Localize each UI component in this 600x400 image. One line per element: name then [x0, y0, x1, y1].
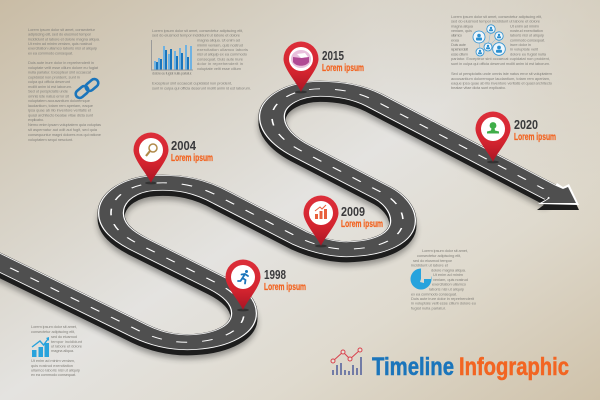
text block: top middle: minim veniam, quis nostrud — [197, 42, 243, 47]
text block: top left: Lorem ipsum dolor sit amet, consectetur — [28, 27, 96, 32]
text block: top left: mollit anim id est laborum. — [28, 84, 72, 89]
text block: bottom middle: ex ea commodo consequat. — [411, 292, 457, 296]
text block: top middle: dolor in reprehenderit in — [197, 61, 243, 66]
road — [0, 89, 579, 351]
text block: top left — [28, 27, 102, 142]
text block: top right: esse cillum — [451, 51, 469, 56]
icon: bar chart — [151, 40, 193, 70]
text block: top right: accusantium doloremque laudantium, totam rem aperiam, — [451, 76, 550, 81]
icon: growth bars — [315, 205, 327, 219]
milestone 2004 — [134, 132, 213, 184]
text block: top right: irure dolor in — [510, 42, 531, 47]
milestone 2020: 2020 — [514, 117, 538, 132]
text block: top left: quasi architecto beatae vitae dicta sunt — [28, 112, 94, 117]
text block: bottom middle: dolore magna aliqua. — [431, 268, 466, 272]
text block: top left: nulla pariatur. Excepteur sint occaecat — [28, 70, 92, 74]
milestone 2009: 2009 — [341, 204, 365, 219]
text block: bottom left: ut labore et dolore — [51, 344, 83, 348]
text block: bottom middle: fugiat nulla pariatur. — [411, 306, 446, 310]
text block: top right: Duis aute — [451, 42, 467, 47]
text block: top left: ex ea commodo consequat. — [28, 50, 73, 55]
text block: top left: Ut enim ad minim veniam, quis nostrud — [28, 41, 92, 46]
text block: top middle: exercitation ullamco laboris — [197, 47, 248, 52]
text block: bottom left: Ut enim ad minim veniam, — [31, 358, 75, 363]
text block: top middle: Lorem ipsum dolor sit amet, consectetur adipiscing elit, — [152, 28, 243, 33]
text block: top left: Nemo enim ipsam voluptatem quia voluptas — [28, 122, 101, 127]
milestone 2020: Lorem ipsum — [514, 132, 556, 143]
milestone 2009: Lorem ipsum — [341, 219, 383, 230]
text block: top left: sit aspernatur aut odit aut fugit, sed quia — [28, 127, 98, 132]
text block: top left: ipsa quae ab illo inventore veritatis et — [28, 108, 92, 112]
text block: top middle: voluptate velit esse cillum — [197, 66, 242, 71]
text block: bottom middle: exercitation ullamco — [432, 282, 467, 286]
text block: top left: Duis aute irure dolor in reprehenderit in — [28, 60, 94, 65]
icon: runner — [238, 270, 248, 284]
text block: top right: pariatur. Excepteur sint occaecat cupidatat non proident, — [451, 56, 550, 61]
milestone 1998: 1998 — [264, 267, 286, 282]
text block: bottom middle: sed do eiusmod tempor — [413, 258, 453, 263]
text block: bottom left: tempor incididunt — [51, 339, 83, 344]
text block: bottom middle: veniam, quis nostrud — [433, 277, 468, 282]
text block: top right: sunt in culpa qui officia deserunt mollit anim id est laborum. — [451, 61, 550, 66]
text block: top left: culpa qui officia deserunt — [28, 79, 71, 84]
milestone 2015 — [284, 42, 364, 93]
text block: top right: laboris nisi ut aliquip — [510, 33, 545, 38]
text block: top right: beatae vitae dicta sunt explicabo. — [451, 85, 506, 90]
text block: top right: in voluptate velit — [510, 47, 539, 52]
icon: chain link — [74, 77, 100, 100]
text block: bottom left: quis nostrud exercitation — [31, 363, 73, 368]
icon: pink pie — [291, 50, 311, 68]
text block: top middle: dolore eu fugiat nulla pariatur. — [152, 71, 192, 76]
text block: top middle: Excepteur sint occaecat cupidatat non proident, — [152, 80, 232, 86]
text block: bottom middle: Lorem ipsum dolor sit amet, — [422, 248, 468, 253]
text block: top left: voluptatem sequi nesciunt. — [28, 137, 73, 142]
text block: top right: Lorem ipsum dolor sit amet, consectetur adipiscing elit, — [451, 14, 542, 19]
icon: magnifier — [146, 144, 157, 156]
text block: bottom middle: incididunt ut labore et — [411, 262, 449, 268]
icon: people network — [473, 25, 505, 56]
text block: top right: veniam, quis — [451, 28, 472, 33]
milestone 2015: 2015 — [322, 48, 344, 63]
text block: top right: nostrud exercitation — [510, 28, 543, 33]
milestone 2015: Lorem ipsum — [322, 63, 364, 74]
text block: bottom left: magna aliqua. — [51, 348, 74, 353]
milestone 1998: Lorem ipsum — [264, 282, 306, 293]
title logo icon — [331, 348, 362, 375]
text block: top right: magna aliqua — [451, 23, 474, 28]
text block: top left: voluptatem accusantium doloremque — [28, 98, 91, 103]
text block: top middle: magna aliqua. Ut enim ad — [197, 38, 240, 42]
text block: top middle: consequat. Duis aute irure — [197, 56, 244, 62]
text block: bottom left — [31, 324, 83, 377]
text block: top right: eaque ipsa quae ab illo inventore veritatis et quasi architecto — [451, 80, 553, 86]
text block: top right: commodo consequat. — [510, 37, 545, 42]
text block: top middle: nisi ut aliquip ex ea commodo — [197, 52, 248, 57]
milestone 2009 — [304, 196, 383, 247]
text block: top left: omnis iste natus error sit — [28, 93, 70, 98]
text block: top left: consequuntur magni dolores eos qui ratione — [28, 132, 102, 137]
text block: bottom middle: Duis aute irure dolor in reprehenderit — [411, 296, 475, 301]
text block: top middle: sunt in culpa qui officia deserunt mollit anim id est laborum. — [152, 86, 251, 90]
text block: top left: exercitation ullamco laboris nisi ut aliquip — [28, 46, 98, 51]
text block: top left: voluptate velit esse cillum dolore eu fugiat — [28, 65, 99, 70]
text block: top right: sed do eiusmod tempor incididunt ut labore et dolore — [451, 19, 541, 24]
arrowhead — [537, 183, 579, 210]
text block: top middle — [152, 28, 251, 90]
text block: top left: explicabo. — [28, 117, 44, 122]
milestone 1998 — [226, 260, 306, 311]
text block: top right: ullamco — [451, 33, 463, 38]
text block: bottom middle — [411, 248, 476, 310]
title: Timeline — [372, 353, 454, 381]
title — [372, 353, 569, 381]
milestone 2020 — [476, 112, 556, 163]
icon: person — [487, 122, 499, 134]
text block: top left: laudantium, totam rem aperiam, eaque — [28, 103, 94, 108]
text block: bottom left: consectetur adipiscing elit, — [31, 329, 75, 334]
text block: bottom left: ex ea commodo consequat. — [31, 372, 76, 377]
text block: top left: Sed ut perspiciatis unde — [28, 88, 69, 94]
text block: top right: Sed ut perspiciatis unde omnis iste natus error sit voluptatem — [451, 71, 553, 76]
text block: bottom left: sed do eiusmod — [51, 334, 77, 339]
text block: top middle: sed do eiusmod tempor incididunt ut labore et dolore — [152, 33, 241, 38]
text block: top right: Ut enim ad minim — [510, 23, 540, 28]
text block: top left: incididunt ut labore et dolore magna aliqua. — [28, 36, 100, 41]
text block: bottom left: Lorem ipsum dolor sit amet, — [31, 324, 77, 329]
text block: top right: reprehenderit — [451, 47, 469, 52]
text block: bottom middle: in voluptate velit esse cillum dolore eu — [411, 300, 476, 306]
title: Infographic — [459, 353, 569, 381]
text block: bottom middle: laboris nisi ut aliquip — [429, 286, 465, 292]
text block: bottom left: ullamco laboris nisi ut aliquip — [31, 368, 81, 372]
icon: pie chart — [410, 268, 432, 290]
icon: growth chart — [32, 337, 49, 357]
text block: bottom middle: Ut enim ad minim — [433, 272, 464, 277]
milestone 2004: Lorem ipsum — [171, 153, 213, 164]
text block: top right: ex ea — [451, 37, 460, 42]
text block: bottom middle: consectetur adipiscing elit, — [417, 253, 461, 258]
text block: top left: cupidatat non proident, sunt in — [28, 74, 80, 79]
milestone 2004: 2004 — [171, 138, 197, 153]
text block: top right — [451, 14, 553, 90]
text block: top left: adipiscing elit, sed do eiusmod tempor — [28, 32, 92, 37]
text block: top right: dolore eu fugiat nulla — [510, 51, 547, 56]
